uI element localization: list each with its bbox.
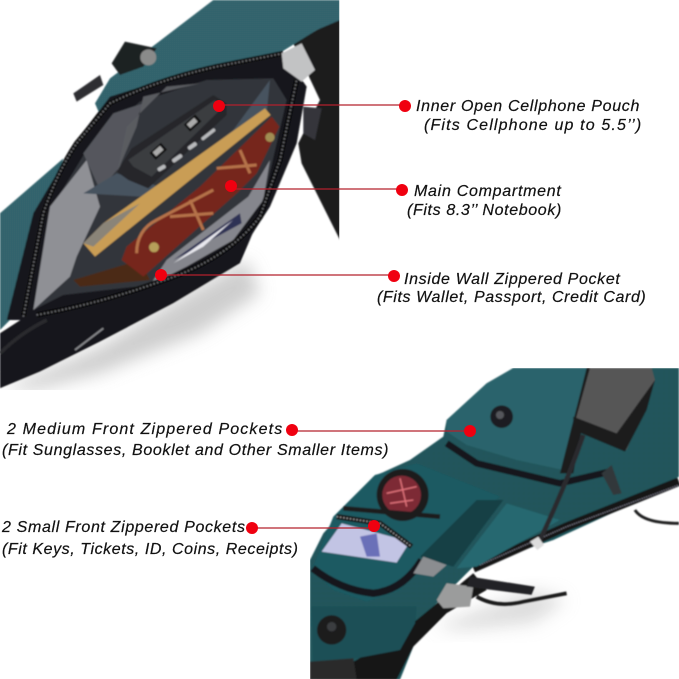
photo: open bag interior: [0, 0, 340, 390]
bank card: [322, 523, 410, 563]
photo: closed bag front: [310, 368, 679, 679]
inner pocket: [150, 160, 270, 285]
zipper: [23, 53, 283, 317]
label: medium pockets title: 2 Medium Front Zippered Pockets: [7, 421, 283, 438]
label: cellphone pouch note: (Fits Cellphone up to 5.5’’): [424, 117, 642, 134]
label: medium pockets note: (Fit Sunglasses, Booklet and Other Smaller Items): [2, 442, 389, 459]
label: wall pocket title: Inside Wall Zippered Pocket: [404, 271, 620, 288]
power bank: [117, 95, 227, 188]
zipper pulls: [282, 43, 315, 82]
label: main compartment note: (Fits 8.3’’ Notebook): [407, 202, 562, 219]
label: small pockets title: 2 Small Front Zippered Pockets: [2, 519, 246, 536]
medium pocket zipper: [447, 443, 610, 483]
zipper: main: [473, 482, 679, 568]
callout line: cellphone pouch: [213, 100, 411, 112]
notebook: [122, 117, 279, 277]
callout line: medium pockets: [286, 424, 476, 437]
callout line: wall pocket: [155, 269, 400, 282]
label: main compartment title: Main Compartment: [414, 183, 562, 200]
small pocket: [320, 468, 494, 594]
label: wall pocket note: (Fits Wallet, Passport, Credit Card): [377, 289, 646, 306]
phone: [83, 108, 271, 257]
callout line: main compartment: [225, 180, 408, 196]
label: cellphone pouch title: Inner Open Cellphone Pouch: [416, 98, 640, 115]
power bank: [573, 368, 655, 450]
callout line: small pockets: [246, 520, 380, 534]
zipper pulls: [635, 510, 679, 523]
snap buttons: [490, 405, 513, 428]
cable: [540, 435, 583, 540]
label: small pockets note: (Fit Keys, Tickets, ID, Coins, Receipts): [2, 541, 298, 558]
logo patch: [377, 469, 429, 521]
